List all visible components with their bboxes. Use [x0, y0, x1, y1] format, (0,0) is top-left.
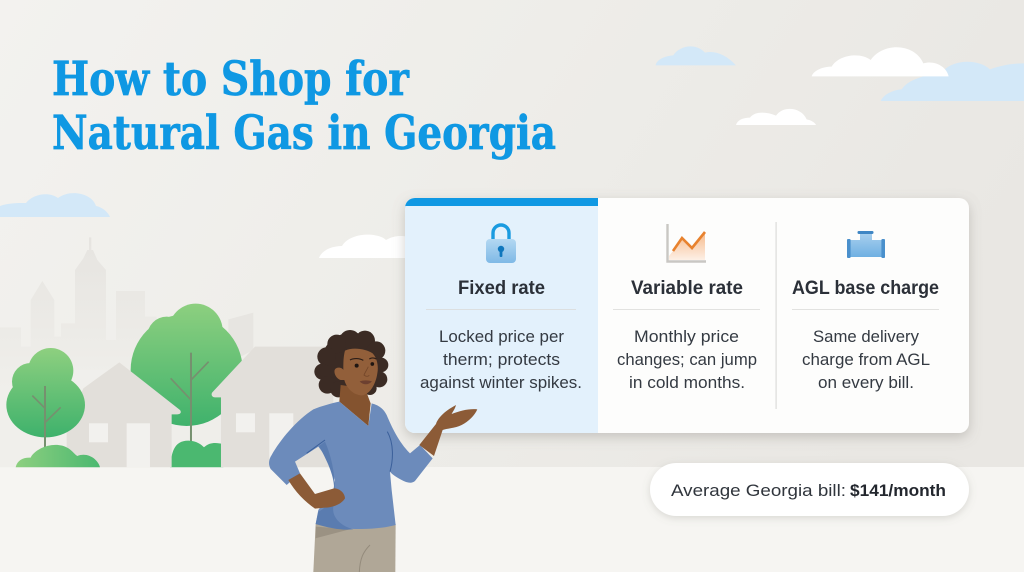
- column divider: [776, 222, 777, 409]
- divider: [613, 309, 760, 310]
- neighborhood scene: [0, 237, 333, 467]
- callout: average bill: Average Georgia bill:: [671, 481, 846, 500]
- cloud: small blue top: [656, 46, 736, 65]
- comparison card: [405, 198, 969, 433]
- large tree: [131, 304, 243, 443]
- woman presenting: [269, 330, 477, 572]
- card body: [405, 198, 969, 433]
- ground: [0, 467, 1024, 572]
- text: fixed rate description: therm; protects: [443, 351, 560, 369]
- icon: gas pipe: [847, 231, 885, 258]
- small tree: [6, 348, 85, 449]
- pants: [313, 524, 396, 572]
- panel: fixed rate: [405, 198, 598, 433]
- text: AGL description: on every bill.: [818, 374, 914, 392]
- house right: [212, 347, 333, 467]
- cloud: large white top: [812, 47, 949, 76]
- heading: AGL base charge: AGL base charge: [792, 278, 939, 299]
- bush left: [16, 445, 100, 467]
- text: variable rate description: [617, 328, 757, 392]
- panel: AGL base charge: [792, 231, 939, 392]
- cloud: white behind card: [319, 235, 410, 258]
- arm: hand on hip: [288, 473, 345, 509]
- title: [52, 52, 556, 161]
- icon: padlock: [486, 225, 516, 263]
- cloud: small white: [736, 109, 816, 125]
- face: [334, 349, 378, 395]
- title: How to Shop for: [52, 52, 410, 107]
- callout: average bill: $141/month: [850, 481, 946, 500]
- skyline tower right: [228, 313, 253, 363]
- house left: [67, 362, 181, 467]
- text: fixed rate description: [420, 328, 582, 392]
- cloud: large blue right: [881, 62, 1024, 101]
- cloud: blue left: [0, 193, 110, 217]
- callout: average bill: [650, 463, 969, 516]
- text: variable rate description: Monthly price: [634, 328, 739, 346]
- heading: fixed rate: Fixed rate: [458, 278, 545, 299]
- text: fixed rate description: Locked price per: [439, 328, 565, 346]
- divider: [792, 309, 939, 310]
- sweater folds: [307, 432, 392, 472]
- arm: raised hand: [419, 405, 477, 456]
- city skyline: [0, 237, 157, 467]
- sweater: [269, 402, 433, 529]
- divider: [426, 309, 576, 310]
- text: variable rate description: changes; can jump: [617, 351, 757, 369]
- text: variable rate description: in cold months.: [629, 374, 745, 392]
- text: AGL description: charge from AGL: [802, 351, 930, 369]
- sweater shading: [316, 442, 353, 530]
- panel: variable rate: [613, 224, 760, 392]
- text: fixed rate description: against winter spikes.: [420, 374, 582, 392]
- heading: variable rate: Variable rate: [631, 278, 743, 299]
- icon: line chart: [668, 224, 706, 262]
- clouds: [0, 46, 1024, 258]
- title: Natural Gas in Georgia: [52, 106, 556, 161]
- hair: [314, 330, 388, 397]
- text: AGL description: Same delivery: [813, 328, 920, 346]
- facial features: [350, 358, 376, 384]
- text: AGL description: [802, 328, 930, 392]
- bush center: [170, 441, 223, 467]
- neck: [339, 385, 371, 426]
